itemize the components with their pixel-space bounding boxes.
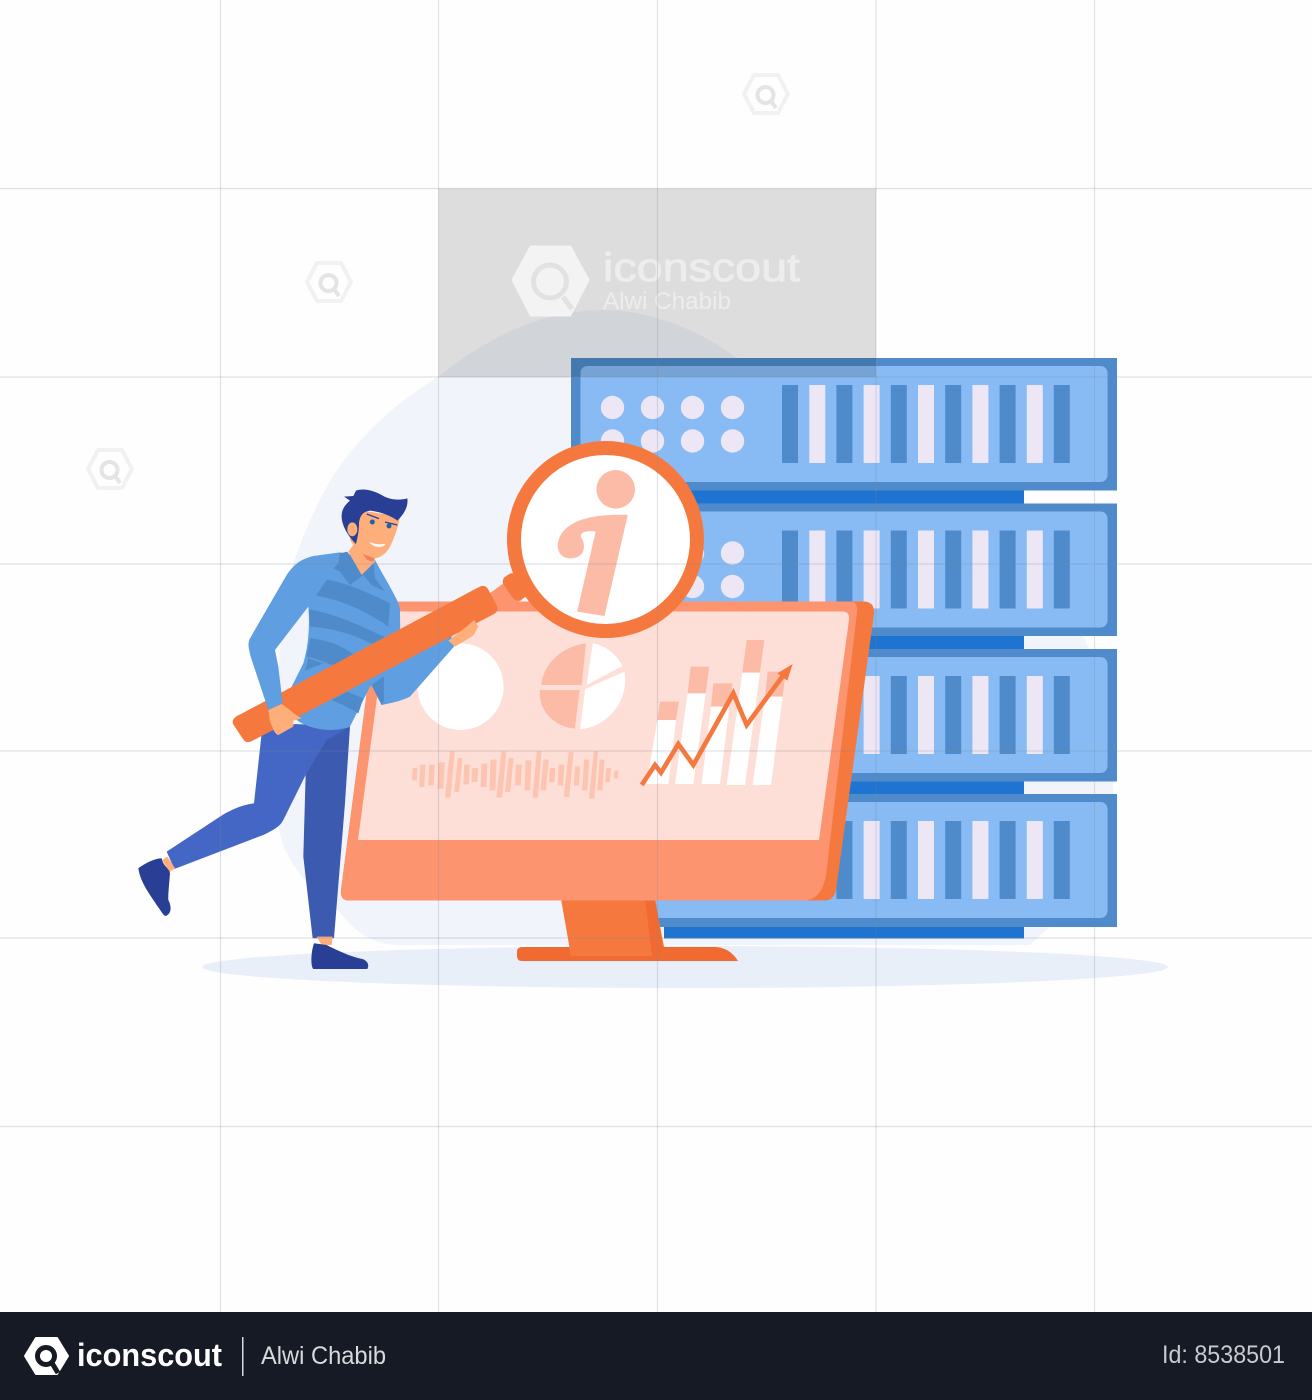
server unit 3 [571,649,1117,782]
monitor stand neck [561,899,664,956]
watermark author: Alwi Chabib [603,288,731,315]
footer divider [242,1337,244,1376]
smile [370,543,385,546]
grey watermark panel [438,188,876,377]
magnifier lens [514,448,697,631]
magnifier handle [233,586,498,742]
white donut chart [417,643,504,730]
server unit 1 [571,358,1117,490]
near hand [268,704,302,735]
right leg [303,727,350,938]
near sleeve [248,557,327,710]
face [350,510,400,559]
ear [347,522,357,536]
shirt stripes [305,552,390,713]
footer asset id: Id: 8538501 [1162,1341,1285,1369]
magnifier neck [486,580,522,612]
magnifier collar [500,571,530,603]
left leg [167,724,350,869]
monitor screen [358,612,849,840]
server unit 4 [571,794,1117,927]
head [342,490,408,575]
small watermark icon 3 [88,450,132,488]
audio waveform [412,752,618,798]
eyebrows [367,514,397,525]
trend line arrow [642,664,793,785]
person [138,552,454,969]
bar chart [647,640,786,785]
center watermark logo [513,246,800,315]
neck shadow [363,554,375,562]
information letter i [558,470,635,616]
ground shadow [202,946,1168,988]
footer brand name: iconscout [77,1337,222,1373]
far sleeve [371,630,454,705]
watermark hexagon icon [513,247,588,315]
hair [342,490,408,544]
monitor stand base [517,947,738,961]
arm and hands in front of handle [248,557,478,735]
footer bar [0,1312,1312,1400]
server unit 2 [571,504,1117,636]
shirt torso [287,552,401,730]
server rack [571,358,1117,938]
small watermark icon 1 [744,75,788,113]
screen charts, in local coordinates [412,643,625,798]
small watermark icon 2 [307,263,351,301]
background blob [273,310,1113,945]
bar chart and trend line [642,640,793,785]
ankles [162,857,333,945]
shirt collar [333,552,385,592]
eyes [370,519,391,528]
footer author: Alwi Chabib [261,1342,386,1370]
pie chart [540,643,625,729]
footer logo icon [25,1338,68,1374]
monitor body [341,602,874,900]
shoes [138,858,368,969]
magnifying glass lens [486,448,697,631]
watermark brand name: iconscout [603,246,800,290]
server connector strips [664,489,1024,938]
monitor [341,602,874,961]
far hand [448,620,478,647]
neck [348,540,375,575]
